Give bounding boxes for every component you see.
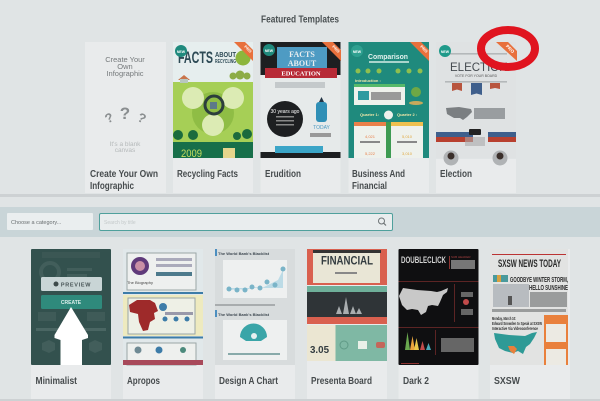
filter bar: [0, 207, 600, 237]
card: create your own infographic: Infographic: [106, 69, 144, 78]
divider: [0, 194, 600, 197]
ribbon: pro: [410, 42, 429, 61]
search box: Search by title: [104, 220, 136, 226]
card: business and financial: 5,222: [365, 151, 376, 156]
dropdown: category: [7, 213, 93, 230]
card: create your own infographic: ?: [120, 104, 130, 123]
card: sxsw: SXSW: [494, 375, 520, 387]
card: business and financial: 4,021: [365, 134, 376, 139]
card: create your own infographic: It's a blank: [110, 141, 141, 148]
badge: new: [263, 44, 275, 56]
card: design a chart: The World Bank's Blacklist: [218, 251, 270, 256]
card: sxsw: Edward Snowden to Speak at SXSW: [492, 321, 542, 326]
card: apropos: The Biography: [127, 280, 153, 285]
card: election: ELECTION: [450, 62, 508, 74]
card: create your own infographic: Create Your: [105, 55, 145, 64]
badge: new: [351, 45, 363, 57]
card: create your own infographic: [85, 42, 166, 193]
card: business and financial: Business And: [352, 168, 405, 180]
button: preview: PREVIEW: [61, 282, 91, 288]
search box: [100, 214, 392, 230]
dropdown: category: Choose a category...: [11, 220, 62, 226]
annotation: red ellipse around pro ribbon: PRO: [505, 44, 516, 55]
card: recycling facts: ABOUT: [215, 52, 237, 59]
badge: new: [175, 45, 187, 57]
badge: new: NEW: [265, 49, 274, 53]
badge: new: NEW: [177, 50, 186, 54]
card: create your own infographic: ?: [135, 109, 149, 126]
bottom edge: [0, 399, 600, 401]
card: erudition: 30 years ago: [271, 109, 300, 115]
card: dark 2: [398, 249, 478, 399]
button: create: CREATE: [61, 300, 82, 306]
card: create your own infographic: ?: [102, 109, 116, 126]
card: recycling facts: FACTS: [178, 48, 213, 67]
ribbon: pro: PRO: [331, 44, 341, 54]
card: erudition: EDUCATION: [281, 70, 321, 78]
card: sxsw: HELLO SUNSHINE: [529, 285, 568, 292]
card: erudition: Erudition: [265, 168, 301, 180]
card: create your own infographic: Own: [117, 62, 133, 71]
card: create your own infographic: Infographic: [90, 180, 134, 192]
ribbon: pro: [234, 42, 253, 61]
card: design a chart: [215, 249, 295, 399]
card: erudition: TODAY: [313, 125, 331, 131]
card: erudition: [260, 42, 341, 193]
card: dark 2: DOUBLECLICK: [401, 255, 446, 265]
button: create: [41, 295, 102, 309]
card: erudition: ABOUT: [288, 59, 317, 68]
card: recycling facts: [173, 42, 253, 193]
card: business and financial: Quarter 1:: [360, 112, 379, 117]
card: presenta board: FINANCIAL: [321, 254, 373, 268]
card: create your own infographic: canvas: [115, 147, 136, 154]
card: design a chart: Design A Chart: [219, 375, 278, 387]
ribbon: pro: PRO: [419, 44, 429, 54]
card: business and financial: 3,010: [402, 151, 413, 156]
badge: new: NEW: [441, 50, 450, 54]
card: business and financial: Introduction :: [355, 78, 381, 83]
card: presenta board: [307, 249, 387, 399]
card: erudition: FACTS: [289, 50, 315, 59]
ribbon: pro: PRO: [243, 44, 253, 54]
card: business and financial: [348, 42, 429, 193]
card: dark 2: Dark 2: [403, 375, 429, 387]
annotation: red ellipse around pro ribbon: [481, 30, 535, 67]
card: apropos: [123, 249, 203, 399]
heading: featured templates: Featured Templates: [261, 14, 339, 26]
badge: new: [439, 45, 451, 57]
card: recycling facts: 2009: [181, 148, 202, 160]
card: dark 2: SUB HEADER: [451, 255, 471, 259]
card: business and financial: Quarter 2 :: [397, 112, 417, 117]
arrow: white up arrow: [54, 307, 88, 365]
card: election: VOTE FOR YOUR BOARD: [455, 74, 498, 78]
card: business and financial: Financial: [352, 180, 387, 192]
card: presenta board: 3.05: [310, 345, 329, 356]
card: minimalist: Minimalist: [36, 375, 77, 387]
card: minimalist: [31, 249, 111, 399]
card: presenta board: Presenta Board: [311, 375, 372, 387]
badge: new: NEW: [353, 50, 362, 54]
ribbon: pro: [322, 42, 341, 61]
card: sxsw: Interactive Via Videoconference: [492, 326, 538, 331]
card: business and financial: 5,010: [402, 134, 413, 139]
card: apropos: Apropos: [127, 375, 160, 387]
button: preview: [41, 277, 102, 291]
card: recycling facts: Recycling Facts: [177, 168, 238, 180]
card: election: Election: [440, 168, 472, 180]
card: sxsw: Monday, March 10:: [492, 316, 516, 321]
card: create your own infographic: Create Your Own: [90, 168, 158, 180]
card: election: [436, 42, 516, 193]
card: recycling facts: RECYCLING: [215, 59, 236, 65]
card: business and financial: Comparison: [368, 54, 408, 61]
card: sxsw: [490, 249, 570, 399]
card: design a chart: The World Bank's Blacklist: [218, 312, 270, 317]
